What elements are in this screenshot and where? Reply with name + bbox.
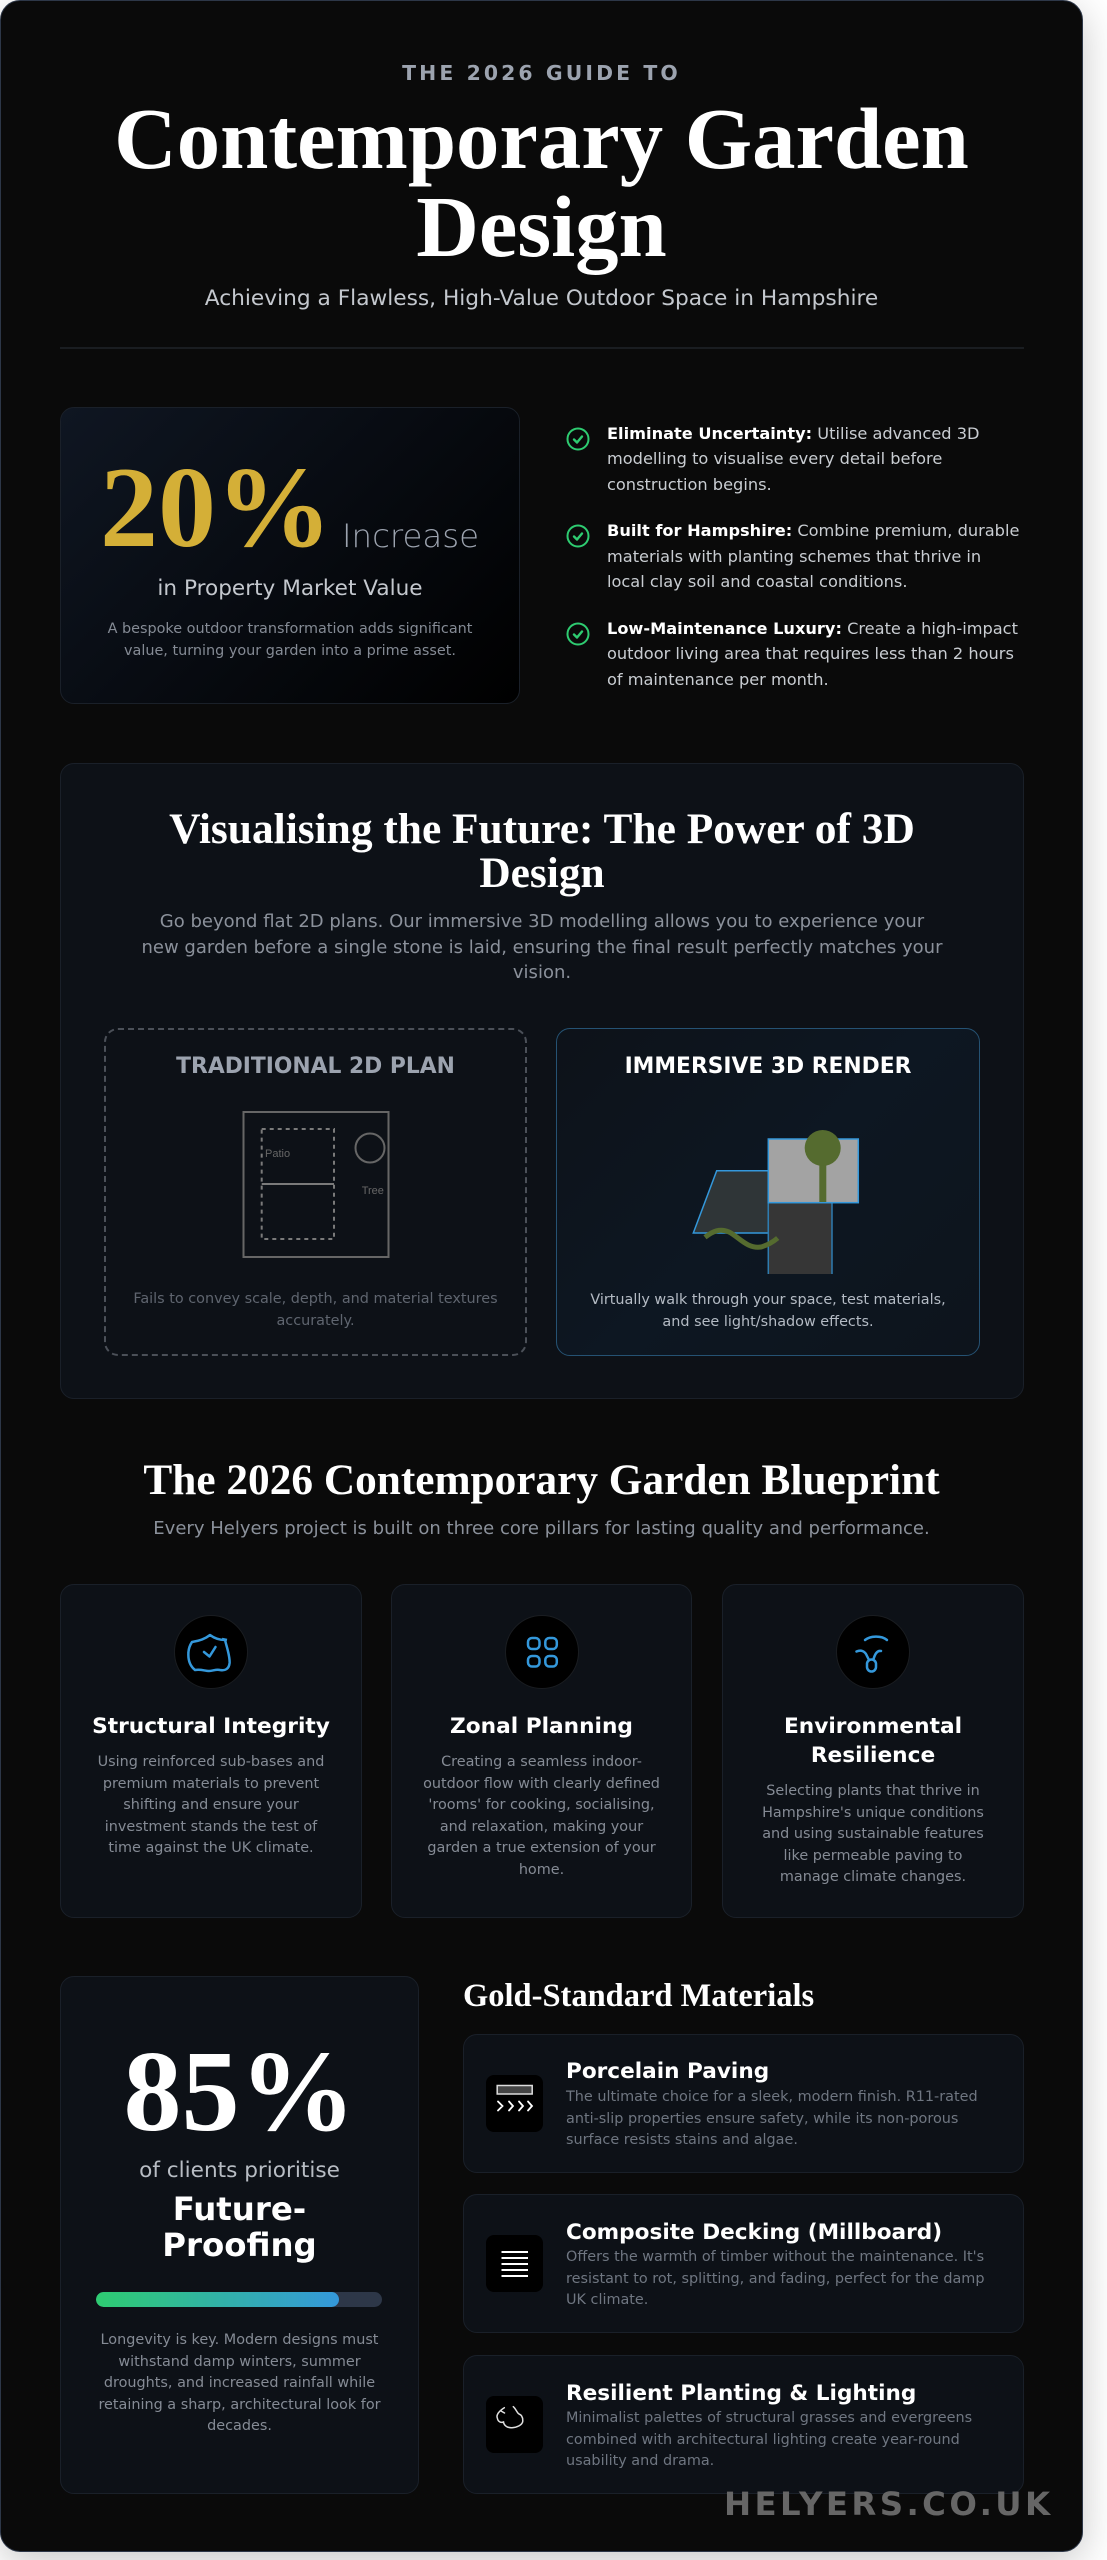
2D plan drawing: Tree: [362, 1185, 384, 1197]
material text: Minimalist palettes of structural grasses and evergreens: [566, 2410, 972, 2426]
material text: [566, 2249, 984, 2308]
card heading: IMMERSIVE 3D RENDER: [625, 1054, 911, 1078]
icon: decking: [486, 2235, 543, 2292]
section intro: [141, 911, 942, 983]
material text: usability and drama.: [566, 2453, 714, 2469]
material text: anti-slip properties ensure safety, while its non-porous: [566, 2111, 958, 2127]
benefit text: [607, 618, 1018, 688]
pillar title: Zonal Planning: [450, 1714, 633, 1739]
material card: composite decking: [463, 2194, 1024, 2333]
benefit 2: [566, 521, 1019, 591]
stat description: [98, 2332, 381, 2434]
pillar text: [762, 1783, 984, 1885]
benefit text: materials with planting schemes that thrive in: [607, 546, 981, 566]
icon: check: [566, 428, 590, 450]
stat number: 20%: [100, 444, 332, 572]
material text: [566, 2410, 972, 2469]
pillar text: Selecting plants that thrive in: [766, 1783, 980, 1799]
header: [114, 61, 969, 310]
material title: Porcelain Paving: [566, 2058, 769, 2084]
pillar card: structural integrity: [60, 1584, 362, 1918]
pillar card: zonal planning: [391, 1584, 692, 1918]
progress bar 85%: [96, 2292, 382, 2307]
benefit text: construction begins.: [607, 474, 772, 494]
benefit text: outdoor living area that requires less than 2 hours: [607, 644, 1014, 663]
icon: shield: [174, 1615, 248, 1689]
pillar text: garden a true extension of your: [427, 1840, 656, 1856]
benefit 3: [566, 618, 1018, 688]
title: [114, 90, 969, 275]
pillar text: and relaxation, making your: [440, 1819, 643, 1835]
stat description: decades.: [207, 2418, 272, 2434]
panel: 3D design: [60, 763, 1024, 1399]
benefit text: [607, 424, 979, 494]
material text: UK climate.: [566, 2292, 648, 2308]
pillar text: and using sustainable features: [762, 1826, 984, 1842]
stat label: in Property Market Value: [157, 576, 423, 601]
pillar text: Creating a seamless indoor-: [441, 1754, 642, 1770]
material text: The ultimate choice for a sleek, modern finish. R11-rated: [566, 2089, 978, 2105]
eyebrow: THE 2026 GUIDE TO: [402, 61, 681, 85]
section intro: Go beyond flat 2D plans. Our immersive 3D modelling allows you to experience your: [160, 911, 924, 932]
section heading: Visualising the Future: The Power of 3D: [169, 805, 915, 853]
pillar text: manage climate changes.: [780, 1869, 966, 1885]
caption: accurately.: [276, 1313, 355, 1329]
stat description: A bespoke outdoor transformation adds significant: [108, 621, 472, 637]
pillar text: time against the UK climate.: [108, 1840, 314, 1856]
stat emphasis: [162, 2190, 317, 2264]
caption: [590, 1292, 946, 1330]
stat description: [108, 621, 472, 659]
panel: traditional 2D plan: [104, 1028, 527, 1356]
pillar text: 'rooms' for cooking, socialising,: [428, 1797, 655, 1813]
stat unit: Increase: [342, 517, 479, 555]
benefit text: of maintenance per month.: [607, 670, 829, 688]
pillar text: outdoor flow with clearly defined: [423, 1776, 660, 1792]
material text: resistant to rot, splitting, and fading, perfect for the damp: [566, 2271, 984, 2287]
material card: resilient planting: [463, 2355, 1024, 2494]
section intro: vision.: [513, 962, 571, 983]
stat description: withstand damp winters, summer: [118, 2354, 361, 2370]
benefit text: [607, 521, 1019, 591]
stat number: 85%: [124, 2028, 356, 2156]
benefit text: local clay soil and coastal conditions.: [607, 572, 907, 591]
icon: check: [566, 622, 590, 646]
panel: immersive 3D render: [556, 1028, 980, 1356]
stat label: of clients prioritise: [139, 2158, 340, 2183]
pillar text: [423, 1754, 660, 1878]
pillar text: Using reinforced sub-bases and: [98, 1754, 324, 1770]
material title: Resilient Planting & Lighting: [566, 2380, 916, 2406]
pillar title: Resilience: [811, 1743, 935, 1768]
material card: porcelain paving: [463, 2034, 1024, 2173]
icon: check: [566, 524, 590, 548]
benefits list: [566, 424, 1019, 688]
stat emphasis: Future-: [173, 2190, 306, 2228]
blueprint heading: The 2026 Contemporary Garden Blueprint: [143, 1456, 940, 1504]
icon: paving: [486, 2075, 543, 2132]
divider: [60, 347, 1024, 349]
2D plan drawing: [242, 1111, 390, 1258]
pillar text: Hampshire's unique conditions: [762, 1805, 984, 1821]
caption: [133, 1291, 498, 1329]
pillar text: [98, 1754, 324, 1856]
title: Contemporary Garden: [114, 90, 969, 186]
benefit text: modelling to visualise every detail before: [607, 449, 942, 468]
materials heading: Gold-Standard Materials: [463, 1978, 814, 2014]
benefit text: Built for Hampshire: Combine premium, durable: [607, 521, 1019, 540]
caption: Virtually walk through your space, test materials,: [590, 1292, 946, 1308]
pillar title: Environmental: [784, 1714, 962, 1739]
pillar title: Structural Integrity: [92, 1714, 330, 1739]
progress fill: [96, 2292, 339, 2307]
icon: zones: [505, 1615, 579, 1689]
stat description: Longevity is key. Modern designs must: [101, 2332, 378, 2348]
pillar text: home.: [519, 1862, 564, 1878]
section heading: [169, 805, 915, 897]
stat emphasis: Proofing: [162, 2226, 317, 2264]
3D render drawing: [692, 1130, 860, 1274]
icon: foliage: [486, 2396, 543, 2453]
pillar title: [784, 1714, 962, 1768]
material text: Offers the warmth of timber without the maintenance. It's: [566, 2249, 984, 2265]
benefit text: Eliminate Uncertainty: Utilise advanced 3D: [607, 424, 979, 442]
benefit text: Low-Maintenance Luxury: Create a high-impact: [607, 618, 1018, 638]
material title: Composite Decking (Millboard): [566, 2220, 942, 2245]
subtitle: Achieving a Flawless, High-Value Outdoor Space in Hampshire: [205, 286, 878, 310]
pillar text: like permeable paving to: [784, 1848, 962, 1864]
caption: and see light/shadow effects.: [662, 1314, 874, 1330]
caption: Fails to convey scale, depth, and material textures: [133, 1291, 498, 1307]
material text: [566, 2089, 978, 2148]
stat description: value, turning your garden into a prime asset.: [124, 643, 456, 659]
stat card: 20% increase: [60, 407, 520, 704]
pillar text: shifting and ensure your: [123, 1797, 299, 1813]
benefit 1: [566, 424, 979, 494]
watermark: HELYERS.CO.UK: [724, 2485, 1053, 2523]
stat description: droughts, and increased rainfall while: [104, 2375, 375, 2391]
pillar card: environmental resilience: [722, 1584, 1024, 1918]
pillar text: premium materials to prevent: [103, 1776, 319, 1792]
2D plan drawing: Patio: [265, 1148, 290, 1160]
section intro: new garden before a single stone is laid, ensuring the final result perfectly matches your: [141, 936, 942, 958]
stat description: retaining a sharp, architectural look for: [98, 2397, 381, 2413]
material text: combined with architectural lighting create year-round: [566, 2432, 960, 2448]
blueprint subtitle: Every Helyers project is built on three core pillars for lasting quality and performance.: [153, 1518, 930, 1539]
pillar text: investment stands the test of: [105, 1819, 317, 1835]
icon: plant: [836, 1615, 910, 1689]
material text: surface resists stains and algae.: [566, 2132, 798, 2148]
title: Design: [416, 178, 667, 274]
section heading: Design: [479, 849, 605, 897]
stat card: 85% future-proofing: [60, 1976, 419, 2494]
card heading: TRADITIONAL 2D PLAN: [176, 1054, 455, 1078]
